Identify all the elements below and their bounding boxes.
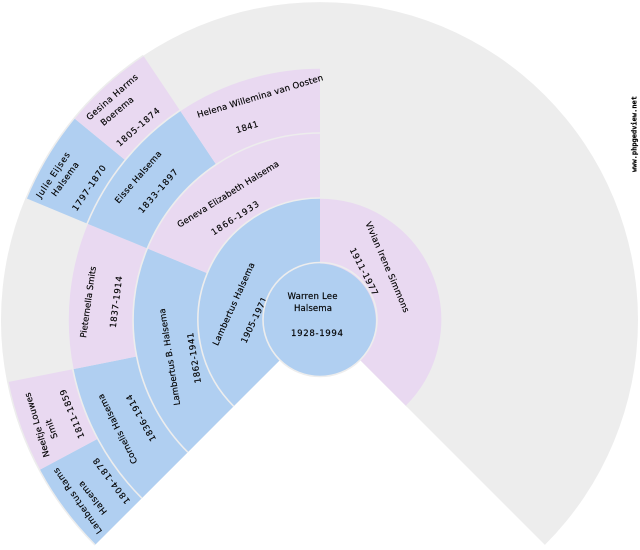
panel: Neeltje Louwes Smit: 1811-1859 — [59, 388, 87, 440]
panel: Lambertus Halsema — [198, 198, 320, 406]
panel: Pieternella Smits — [68, 224, 147, 369]
panel: Gesina Harms Boerema: 1805-1874 — [115, 106, 162, 149]
panel: Helena Willemina van Oosten: 1841 — [235, 120, 260, 136]
panel: Warren Lee Halsema (centre): Warren Lee — [288, 292, 338, 302]
panel: Lambertus B. Halsema: Lambertus B. Halsema — [158, 308, 183, 406]
panel: Lambertus B. Halsema: 1862-1941 — [186, 332, 204, 384]
panel: Geneva Elizabeth Halsema: 1866-1933 — [210, 200, 261, 238]
panel: Lambertus Halsema: Lambertus Halsema — [211, 261, 257, 347]
panel: Lambertus Halsema: 1905-1971 — [240, 296, 270, 345]
panel: Geneva Elizabeth Halsema: Geneva Elizabeth Halsema — [176, 159, 281, 230]
panel: Warren Lee Halsema (centre): Halsema — [294, 304, 332, 314]
panel: Eisse Halsema: Eisse Halsema — [113, 149, 164, 206]
panel: Julie Eijses Halsema — [26, 118, 125, 224]
panel: Vivian Irene Simmons: 1911-1977 — [347, 247, 379, 297]
panel: Helena Willemina van Oosten: Helena Willemina van Oosten — [196, 73, 324, 121]
panel: Gesina Harms Boerema: Gesina Harms — [85, 72, 141, 123]
panel: Warren Lee Halsema (centre) — [263, 262, 377, 376]
panel: Lambertus Rams Halsema: Lambertus Rams — [52, 465, 105, 535]
panel: Neeltje Louwes Smit: Smit — [44, 417, 61, 440]
panel: Cornelis Halsema: 1836-1914 — [125, 392, 159, 443]
panel: Neeltje Louwes Smit — [8, 369, 98, 470]
panel: Helena Willemina van Oosten — [180, 68, 324, 164]
panel: Gesina Harms Boerema — [74, 56, 180, 160]
panel: Vivian Irene Simmons: Vivian Irene Simmons — [363, 220, 411, 315]
panel: Geneva Elizabeth Halsema — [147, 133, 320, 273]
panel: Lambertus Rams Halsema: 1804-1878 — [92, 455, 133, 505]
panel: Julie Eijses Halsema: 1797-1870 — [71, 164, 109, 213]
panel: Lambertus B. Halsema — [133, 248, 234, 452]
panel: Pieternella Smits: Pieternella Smits — [79, 265, 99, 338]
panel: Gesina Harms Boerema: Boerema — [99, 95, 136, 128]
panel: Julie Eijses Halsema: Julie Eijses — [34, 150, 73, 201]
panel: Cornelis Halsema: Cornelis Halsema — [96, 392, 140, 465]
watermark: www.phpgedview.net: www.phpgedview.net — [630, 96, 638, 172]
panel: Neeltje Louwes Smit: Neeltje Louwes — [23, 391, 53, 458]
panel: Lambertus Rams Halsema — [40, 439, 142, 545]
panel: Warren Lee Halsema (centre): 1928-1994 — [291, 329, 343, 339]
panel: Lambertus Rams Halsema: Halsema — [77, 479, 110, 516]
panel: Cornelis Halsema — [73, 356, 188, 498]
panel: Vivian Irene Simmons — [320, 198, 442, 406]
panel: Julie Eijses Halsema: Halsema — [50, 160, 82, 199]
panel: Eisse Halsema — [87, 110, 216, 248]
panel: Pieternella Smits: 1837-1914 — [109, 276, 125, 329]
panel: Eisse Halsema: 1833-1897 — [137, 168, 181, 216]
